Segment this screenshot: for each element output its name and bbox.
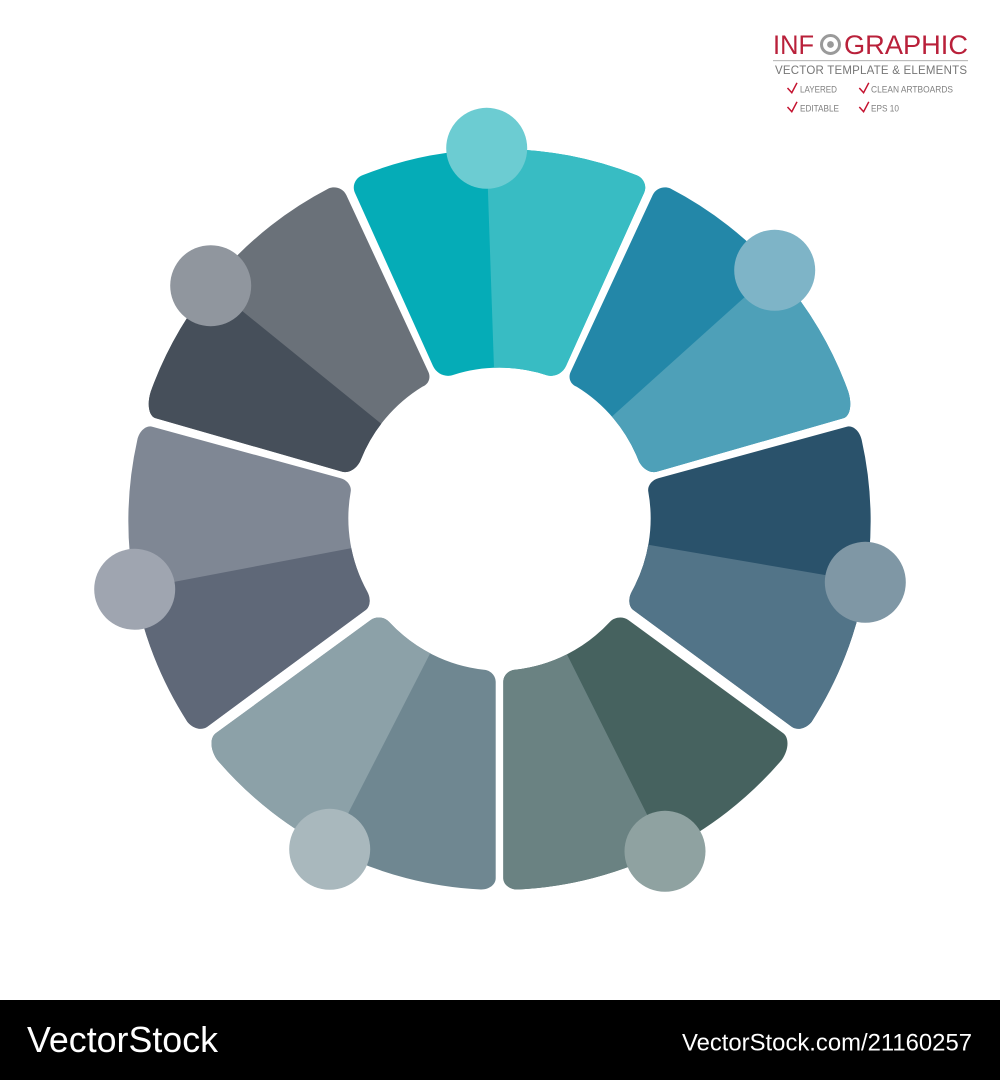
feature: clean artboards: CLEAN ARTBOARDS (871, 84, 953, 94)
node circle: top (446, 108, 527, 189)
footer bar (0, 1000, 1000, 1080)
logo title: GRAPHIC (844, 30, 968, 60)
node circle: left (94, 549, 175, 630)
node circle: right (825, 542, 906, 623)
node circle: lower left (289, 809, 370, 890)
logo block: infographic template (773, 30, 968, 114)
node circle: upper right (734, 230, 815, 311)
segment: lower right green-grey (500, 617, 787, 900)
segment: right navy (629, 426, 871, 729)
segment: top teal (354, 150, 646, 376)
segment: upper right blue (570, 187, 850, 472)
logo title (773, 30, 968, 60)
node circle: upper left (170, 245, 251, 326)
feature: eps 10 (859, 102, 899, 114)
feature: eps 10: EPS 10 (871, 104, 899, 114)
feature: layered: LAYERED (800, 84, 837, 94)
segment: left slate (128, 426, 370, 729)
logo subtitle: VECTOR TEMPLATE & ELEMENTS (775, 65, 967, 77)
feature: editable (788, 102, 839, 114)
segment: upper left charcoal (148, 187, 430, 472)
circular diagram (94, 108, 906, 900)
logo title: INF (773, 30, 814, 60)
node circle: lower right (624, 811, 706, 892)
footer brand: VectorStock (27, 1019, 219, 1060)
footer image id: VectorStock.com/21160257 (682, 1030, 972, 1056)
feature: editable: EDITABLE (800, 104, 839, 114)
segment: lower left blue-grey (212, 618, 496, 890)
feature: layered (788, 83, 837, 94)
